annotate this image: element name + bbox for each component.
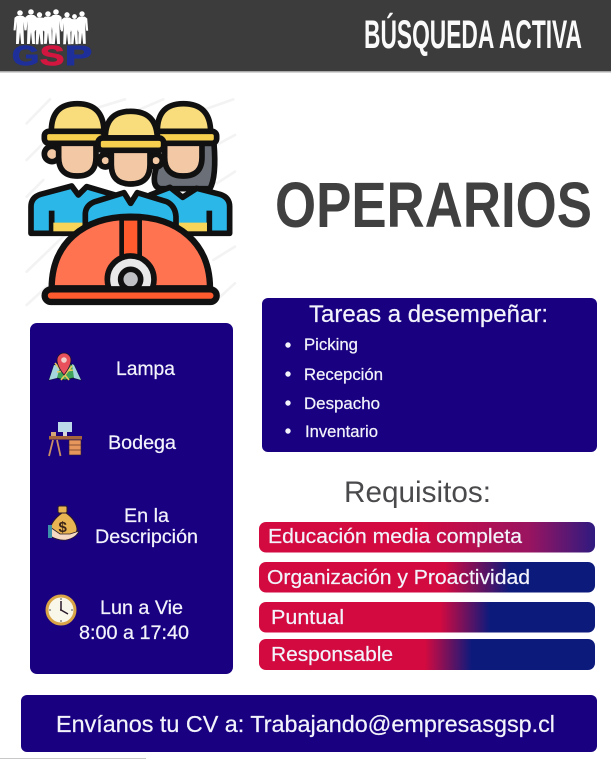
logo letters: S	[40, 40, 64, 71]
tasks heading: Tareas a desempeñar:	[309, 301, 548, 328]
requirements list	[259, 522, 595, 670]
panel: contact call to action: Envíanos tu CV a: Trabajando@empresasgsp.cl	[56, 711, 555, 737]
requirement: organization: Organización y Proactividad	[267, 567, 530, 589]
task list	[285, 336, 383, 441]
panel: contact call to action	[21, 695, 597, 752]
icon: money bag in hand	[48, 506, 79, 540]
task list: Recepción	[304, 366, 383, 384]
text: Lun a Vie 8:00 a 17:40	[79, 598, 189, 644]
logo letters: P	[65, 40, 92, 71]
logo silhouettes	[14, 9, 88, 44]
requirement: education	[259, 522, 595, 552]
header bar	[0, 0, 611, 72]
requirement: punctual	[259, 602, 595, 632]
icon: clock	[47, 596, 75, 624]
panel: details	[30, 323, 233, 674]
task list: Picking	[304, 336, 358, 354]
icon: money bag in hand: $	[58, 519, 68, 536]
right worker	[150, 104, 230, 233]
requirement: education: Educación media completa	[268, 526, 523, 548]
requirement: responsible: Responsable	[271, 644, 393, 666]
logo: GSP	[12, 9, 92, 71]
logo letters	[12, 39, 92, 71]
text: En la Descripción: Descripción	[95, 527, 198, 548]
text: Lun a Vie 8:00 a 17:40: Lun a Vie	[100, 598, 183, 619]
requirement: responsible	[259, 639, 595, 670]
icon: desk	[49, 422, 82, 456]
text: En la Descripción	[95, 506, 198, 548]
text: En la Descripción: En la	[124, 506, 169, 527]
icon: map pin	[49, 353, 81, 380]
requirement: punctual: Puntual	[271, 607, 344, 629]
logo letters: G	[12, 39, 39, 71]
task list: Despacho	[304, 395, 380, 413]
icon: workers with helmet	[27, 99, 235, 305]
center worker	[85, 111, 176, 227]
large red helmet	[45, 217, 217, 303]
text: Lun a Vie 8:00 a 17:40: 8:00 a 17:40	[79, 623, 189, 644]
text: Lampa: Lampa	[116, 359, 175, 380]
requirements heading: Requisitos:	[344, 476, 491, 509]
text: Bodega: Bodega	[108, 433, 176, 454]
task list: Inventario	[305, 423, 378, 441]
left worker	[31, 104, 115, 233]
panel: tasks	[262, 298, 597, 452]
requirement: organization	[259, 562, 595, 592]
